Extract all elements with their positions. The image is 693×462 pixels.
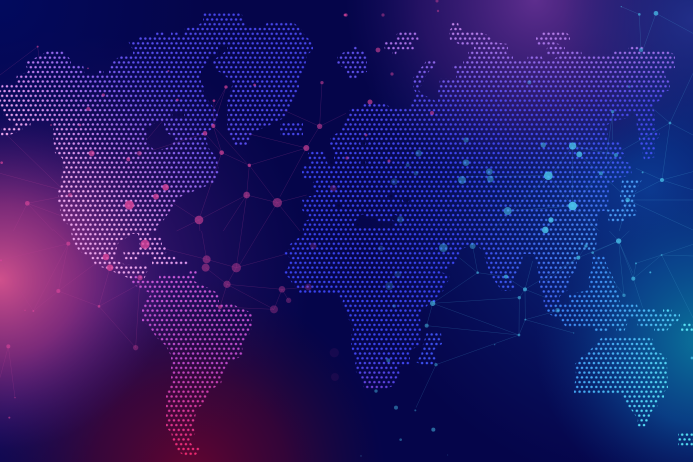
North America and Greenland <box>0 12 313 284</box>
Madagascar <box>416 332 442 366</box>
pink network: lower left lines and nodes <box>0 229 339 419</box>
South America <box>131 270 252 456</box>
Iceland <box>280 123 303 136</box>
Japan and Korea <box>606 180 642 222</box>
Eurasia and Africa <box>284 22 675 390</box>
small Pacific island <box>663 309 672 312</box>
cyan network: upper right lines and nodes <box>391 6 693 233</box>
pink network: upper left lines and nodes <box>0 14 346 231</box>
British Isles <box>337 46 367 79</box>
pink stray nodes near Europe <box>344 0 439 162</box>
Svalbard <box>384 32 418 54</box>
cyan network: lower right lines and nodes <box>360 231 693 457</box>
Tasmania and New Zealand <box>678 433 693 447</box>
Australia <box>574 337 668 428</box>
South East Asia and Indonesia <box>546 256 680 332</box>
New Guinea east <box>681 324 693 331</box>
